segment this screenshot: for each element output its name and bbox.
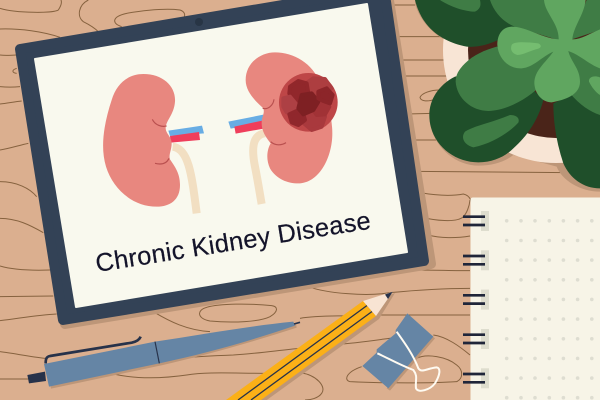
pencil shadow (229, 293, 395, 400)
left ureter (173, 147, 197, 213)
left renal vein (168, 126, 204, 136)
diseased kidney (246, 52, 332, 183)
pencil stripes (238, 306, 372, 400)
right renal artery (234, 120, 265, 134)
mid leaf: left (456, 47, 557, 111)
mid leaf: top right (570, 0, 600, 40)
tumour (279, 73, 338, 132)
dot grid (505, 219, 594, 400)
right leaf highlight (589, 76, 600, 95)
pen seam (155, 342, 159, 363)
pencil wood tip (363, 292, 393, 316)
right ureter (253, 133, 265, 204)
notebook (463, 198, 600, 400)
highlight on top leaf (440, 0, 480, 12)
leaf highlight (511, 42, 541, 55)
plant shadow (415, 0, 600, 192)
dark leaf: lower left (429, 67, 543, 162)
pen shadow (47, 324, 297, 389)
mid leaf: top (490, 0, 563, 42)
mid leaf: right (568, 50, 600, 115)
potted plant (415, 0, 600, 192)
pencil (226, 292, 395, 400)
left renal artery (170, 132, 200, 143)
dark leaf: lower right (553, 93, 600, 188)
pencil body (226, 301, 376, 400)
clip wire (377, 332, 439, 391)
tablet camera (195, 18, 203, 26)
pen (27, 322, 300, 389)
pot soil (468, 0, 600, 138)
highlight on lower left leaf (463, 115, 519, 147)
tablet shadow (22, 0, 431, 324)
binding tabs (481, 211, 489, 388)
tablet frame (20, 0, 424, 320)
notebook page (470, 198, 600, 400)
clip shadow (387, 336, 435, 391)
spiral rings (463, 217, 485, 382)
pencil lead (385, 292, 393, 299)
saucer (443, 0, 600, 163)
pen end button (27, 372, 46, 383)
tablet screen (35, 4, 407, 307)
tablet (20, 0, 431, 324)
dark leaf: top (415, 0, 523, 47)
healthy kidney (103, 74, 180, 207)
binder clip (362, 313, 439, 391)
pen body (44, 322, 295, 387)
light clover leaf (497, 0, 600, 102)
caption: Chronic Kidney Disease: Chronic Kidney Disease (94, 207, 373, 278)
clip body (362, 313, 433, 388)
pen clip (46, 337, 141, 363)
pen tip (294, 322, 300, 324)
right renal vein (228, 115, 265, 129)
